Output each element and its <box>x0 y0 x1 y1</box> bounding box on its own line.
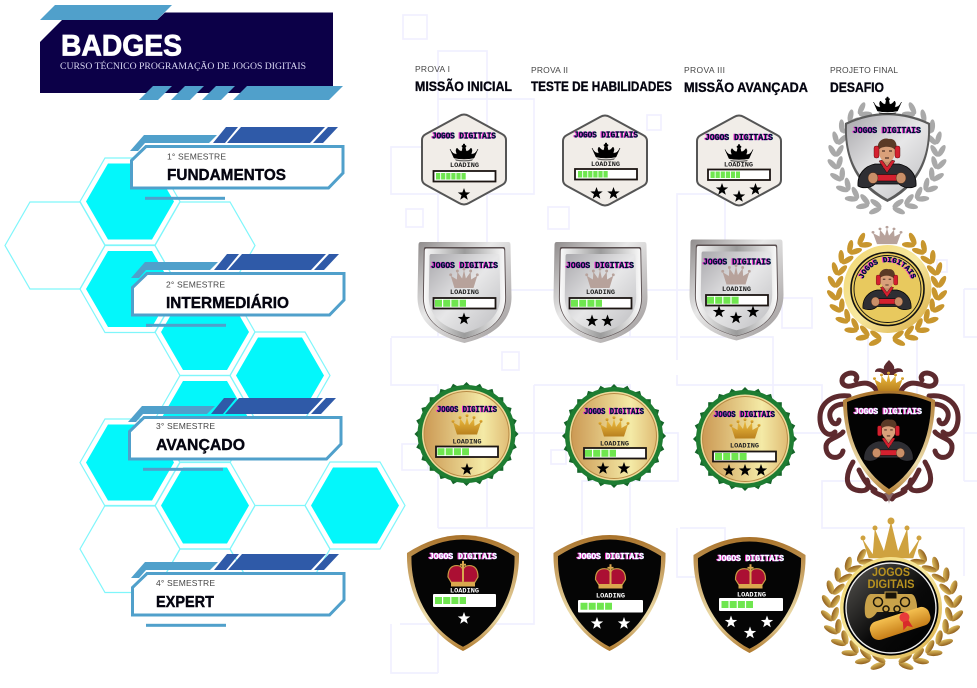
badge: intermediario prova III: JOGOS DIGITAIS <box>703 256 771 268</box>
badge: desafio gold seal: JOGOS DIGITAIS <box>858 256 916 278</box>
card: 3º semestre: 3° SEMESTRE <box>156 421 215 431</box>
card: 3º semestre: AVANÇADO <box>156 437 245 454</box>
badge: fundamentos prova II: LOADING <box>591 161 620 168</box>
card: 1º semestre: 1° SEMESTRE <box>167 152 226 162</box>
badge: desafio gold seal <box>826 226 947 346</box>
badge: fundamentos prova I <box>422 114 506 204</box>
badge: expert prova III: JOGOS DIGITAIS <box>717 553 784 564</box>
badge: avancado prova III <box>693 387 797 491</box>
badge: avancado prova I <box>414 382 519 486</box>
column heading: prova II <box>531 65 672 94</box>
card: 3º semestre <box>128 398 341 471</box>
badge: desafio ornamental shield: JOGOS DIGITAIS <box>854 406 922 417</box>
title: BADGES <box>61 30 182 62</box>
column heading: prova III <box>684 65 808 95</box>
column heading: projeto final: PROJETO FINAL <box>830 65 898 75</box>
honeycomb hexagons <box>5 158 405 592</box>
badge: desafio silver shield <box>825 97 949 217</box>
badge: avancado prova I: LOADING <box>452 438 482 446</box>
badge: intermediario prova II <box>554 242 648 343</box>
badge: avancado prova I: JOGOS DIGITAIS <box>437 404 497 415</box>
badge: intermediario prova I: LOADING <box>450 289 479 296</box>
badge: avancado prova II <box>562 384 666 488</box>
badge: intermediario prova III: LOADING <box>722 286 751 293</box>
badge: fundamentos prova III: JOGOS DIGITAIS <box>705 132 773 143</box>
card: 4º semestre: 4° SEMESTRE <box>156 578 215 588</box>
badge: fundamentos prova III <box>697 116 781 206</box>
icon: game controller <box>865 592 917 618</box>
badge: desafio silver shield: JOGOS DIGITAIS <box>853 125 921 136</box>
badge: fundamentos prova III: LOADING <box>724 162 753 168</box>
column heading: prova I: MISSÃO INICIAL <box>415 79 512 94</box>
badge: intermediario prova II: JOGOS DIGITAIS <box>566 260 634 271</box>
card: 2º semestre <box>131 254 344 327</box>
column heading: projeto final <box>830 65 898 95</box>
badge: intermediario prova I: JOGOS DIGITAIS <box>431 260 498 271</box>
badge: desafio game controller medal: JOGOS <box>872 567 910 579</box>
badge: desafio ornamental shield <box>820 360 958 504</box>
column heading: projeto final: DESAFIO <box>830 80 884 95</box>
icon: diploma scroll <box>868 605 933 642</box>
badge: expert prova III <box>693 537 806 653</box>
badge: intermediario prova II: LOADING <box>586 289 615 296</box>
background grid pattern <box>391 15 977 673</box>
badge: expert prova I: LOADING <box>450 588 479 594</box>
card: 1º semestre <box>130 127 343 200</box>
header banner <box>40 5 343 100</box>
card: 2º semestre: INTERMEDIÁRIO <box>166 293 289 312</box>
badge: avancado prova III: JOGOS DIGITAIS <box>714 409 775 420</box>
subtitle: CURSO TÉCNICO PROGRAMAÇÃO DE JOGOS DIGITAIS <box>60 60 306 72</box>
badge: expert prova III: LOADING <box>737 592 766 598</box>
badge: desafio game controller medal: DIGITAIS <box>868 579 915 591</box>
badge: expert prova II: LOADING <box>596 592 625 600</box>
badge: expert prova II: JOGOS DIGITAIS <box>577 551 644 562</box>
badge: fundamentos prova I: LOADING <box>450 162 479 169</box>
column heading: prova III: MISSÃO AVANÇADA <box>684 80 808 95</box>
badge: fundamentos prova II <box>563 116 647 206</box>
badge: expert prova II <box>553 535 666 651</box>
column heading: prova II: TESTE DE HABILIDADES <box>531 79 672 94</box>
card: 2º semestre: 2° SEMESTRE <box>166 280 225 290</box>
badge: fundamentos prova II: JOGOS DIGITAIS <box>574 130 638 140</box>
badge: expert prova I <box>407 535 519 651</box>
badge: intermediario prova III <box>690 240 784 340</box>
badge: fundamentos prova I: JOGOS DIGITAIS <box>432 130 496 142</box>
column heading: prova III: PROVA III <box>684 65 725 75</box>
badge: avancado prova II: LOADING <box>600 440 629 448</box>
badge: intermediario prova I <box>418 242 512 343</box>
badge: avancado prova II: JOGOS DIGITAIS <box>584 406 644 417</box>
column heading: prova II: PROVA II <box>531 65 568 75</box>
badge: expert prova I: JOGOS DIGITAIS <box>429 551 497 562</box>
card: 1º semestre: FUNDAMENTOS <box>167 167 286 184</box>
badge: desafio game controller medal <box>818 518 966 673</box>
card: 4º semestre <box>131 554 344 627</box>
column heading: prova I: PROVA I <box>415 64 450 74</box>
badge: avancado prova III: LOADING <box>730 442 759 450</box>
column heading: prova I <box>415 64 512 94</box>
card: 4º semestre: EXPERT <box>156 594 214 611</box>
